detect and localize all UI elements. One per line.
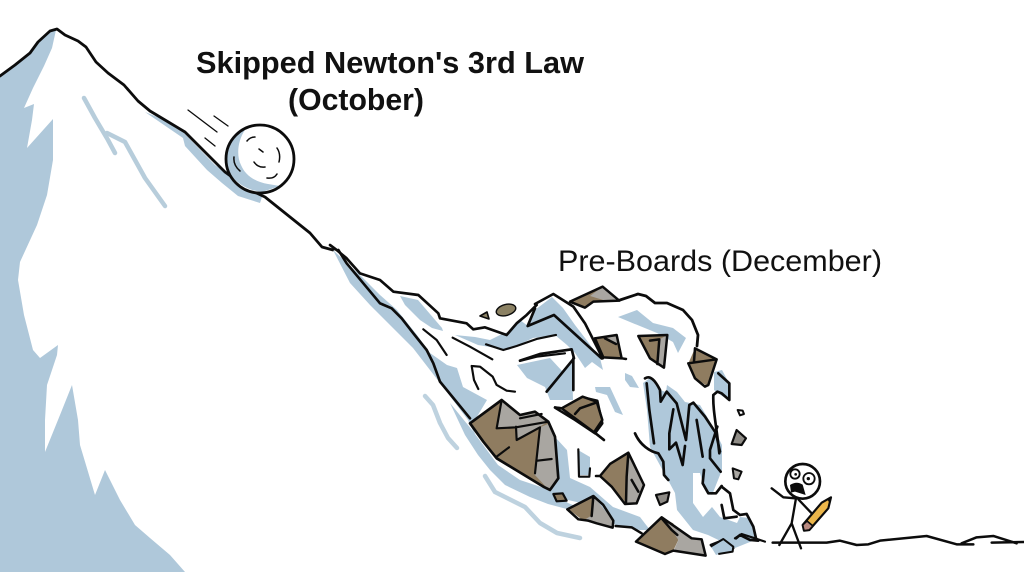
snowball trail shadow — [145, 112, 262, 203]
rock: medium top — [555, 397, 604, 440]
stick figure with pencil — [772, 464, 1024, 548]
subtitle: October: (October) — [288, 82, 424, 117]
ground line — [773, 536, 1024, 545]
mouth — [790, 483, 806, 495]
mountain ridge line — [0, 29, 333, 250]
rock: tiny centre right — [656, 492, 669, 505]
rock: lower left of pile — [555, 397, 604, 440]
rock: small — [553, 493, 567, 501]
title: Skipped Newton's 3rd Law: Skipped Newton's 3rd Law — [196, 45, 585, 80]
falling debris — [738, 410, 744, 415]
rock: mid — [638, 335, 667, 368]
eyes — [790, 469, 815, 484]
head — [785, 464, 820, 499]
left debris trail streaks — [425, 396, 580, 538]
rock: top ridge — [570, 287, 619, 308]
motion lines — [188, 110, 228, 146]
rocks upper pile — [555, 287, 717, 440]
rock: mid left — [595, 335, 626, 359]
floating debris near top — [480, 302, 517, 319]
mountain shadow — [0, 30, 185, 572]
rock: centre — [596, 453, 644, 504]
rock: low left — [567, 496, 642, 533]
avalanche pile outlines upper — [520, 294, 603, 392]
mountain crevasse streaks — [84, 98, 165, 206]
white-blue fragment — [711, 539, 733, 554]
rock: right — [688, 348, 717, 387]
body — [772, 488, 812, 548]
rock: bottom — [636, 517, 706, 556]
label: Pre-Boards December: Pre-Boards (December) — [558, 245, 882, 278]
rock cluster lower — [470, 397, 765, 556]
pencil — [803, 497, 831, 531]
pile top outline — [620, 294, 698, 346]
icicle outlines — [635, 373, 758, 548]
snowball — [226, 125, 294, 193]
avalanche outlines — [330, 245, 565, 418]
avalanche blue snow — [333, 250, 755, 555]
rock: large — [470, 400, 558, 490]
